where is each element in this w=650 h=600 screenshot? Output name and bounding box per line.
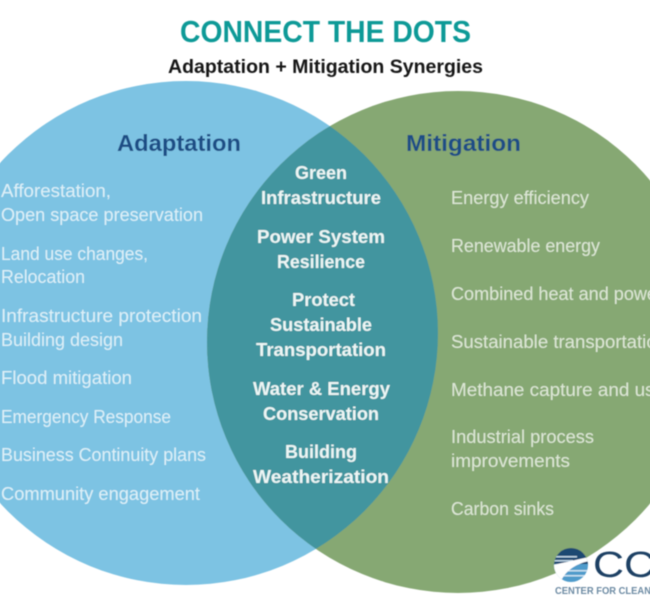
- synergies list: Protect: [292, 290, 355, 310]
- mitigation circle: [207, 91, 650, 593]
- synergies list: Green: [295, 163, 347, 183]
- mitigation list: improvements: [451, 451, 570, 471]
- synergies list: Building: [285, 442, 357, 462]
- adaptation list: Community engagement: [1, 484, 200, 504]
- adaptation list: Emergency Response: [1, 407, 171, 427]
- logo letters: CC: [593, 544, 650, 585]
- adaptation list: Business Continuity plans: [1, 445, 206, 465]
- mitigation list: Industrial process: [451, 427, 594, 447]
- icon: logo globe: [553, 547, 589, 583]
- mitigation list: Carbon sinks: [451, 499, 554, 519]
- synergies list: [253, 163, 390, 487]
- title: CONNECT THE DOTS: [180, 14, 471, 49]
- synergies list: Sustainable: [270, 315, 372, 335]
- adaptation list: Afforestation,: [1, 181, 111, 201]
- synergies list: Power System: [257, 227, 385, 247]
- adaptation list: Land use changes,: [1, 244, 148, 264]
- adaptation circle: [0, 81, 438, 585]
- adaptation list: Building design: [1, 330, 123, 350]
- adaptation list: Flood mitigation: [1, 368, 132, 388]
- adaptation list: Open space preservation: [1, 205, 203, 225]
- mitigation list: Energy efficiency: [451, 188, 589, 208]
- heading: adaptation: Adaptation: [117, 130, 241, 156]
- synergies list: Infrastructure: [261, 188, 381, 208]
- synergies list: Water & Energy: [253, 379, 390, 399]
- synergies list: Weatherization: [253, 467, 389, 487]
- mitigation list: [451, 188, 650, 519]
- mitigation list: Methane capture and use: [451, 380, 650, 400]
- adaptation list: Relocation: [1, 267, 85, 287]
- adaptation list: [1, 181, 206, 504]
- synergies list: Resilience: [277, 252, 365, 272]
- synergies list: Transportation: [256, 340, 386, 360]
- heading: mitigation: Mitigation: [406, 130, 521, 156]
- subtitle: Adaptation + Mitigation Synergies: [168, 57, 483, 78]
- adaptation list: Infrastructure protection: [1, 306, 202, 326]
- mitigation list: Renewable energy: [451, 236, 600, 256]
- logo: [553, 548, 650, 595]
- synergies list: Conservation: [263, 404, 379, 424]
- overlap lens: [206, 126, 438, 549]
